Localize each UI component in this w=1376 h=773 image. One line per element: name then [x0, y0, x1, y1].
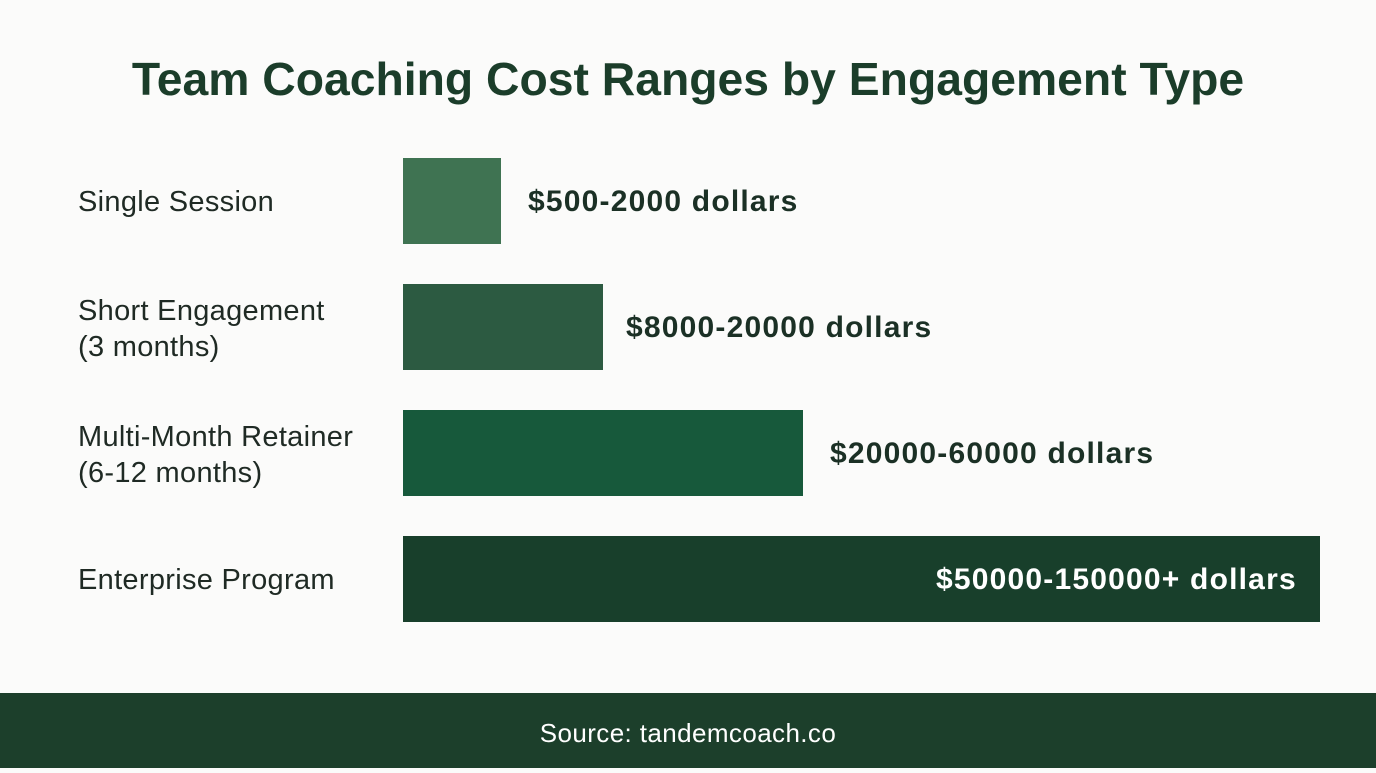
bar: enterprise program — [403, 536, 1320, 622]
label: multi-month retainer: (6-12 months) — [78, 457, 262, 489]
label: single session: Single Session — [78, 186, 274, 218]
footer: source — [0, 693, 1376, 768]
label: short engagement: Short Engagement — [78, 295, 325, 327]
label: multi-month retainer: Multi-Month Retainer — [78, 421, 353, 453]
bar: single session — [403, 158, 501, 244]
value: multi-month retainer: $20000-60000 dollars — [830, 437, 1154, 470]
bar: short engagement — [403, 284, 603, 370]
bar: multi-month retainer — [403, 410, 803, 496]
label: multi-month retainer — [78, 421, 353, 489]
value: enterprise program: $50000-150000+ dollars — [936, 563, 1297, 596]
label: short engagement: (3 months) — [78, 331, 220, 363]
label: short engagement — [78, 295, 325, 363]
footer: source: Source: tandemcoach.co — [540, 718, 836, 748]
value: single session: $500-2000 dollars — [528, 185, 799, 218]
label: enterprise program: Enterprise Program — [78, 564, 335, 596]
value: short engagement: $8000-20000 dollars — [626, 311, 932, 344]
title: Team Coaching Cost Ranges by Engagement Type — [132, 53, 1244, 105]
